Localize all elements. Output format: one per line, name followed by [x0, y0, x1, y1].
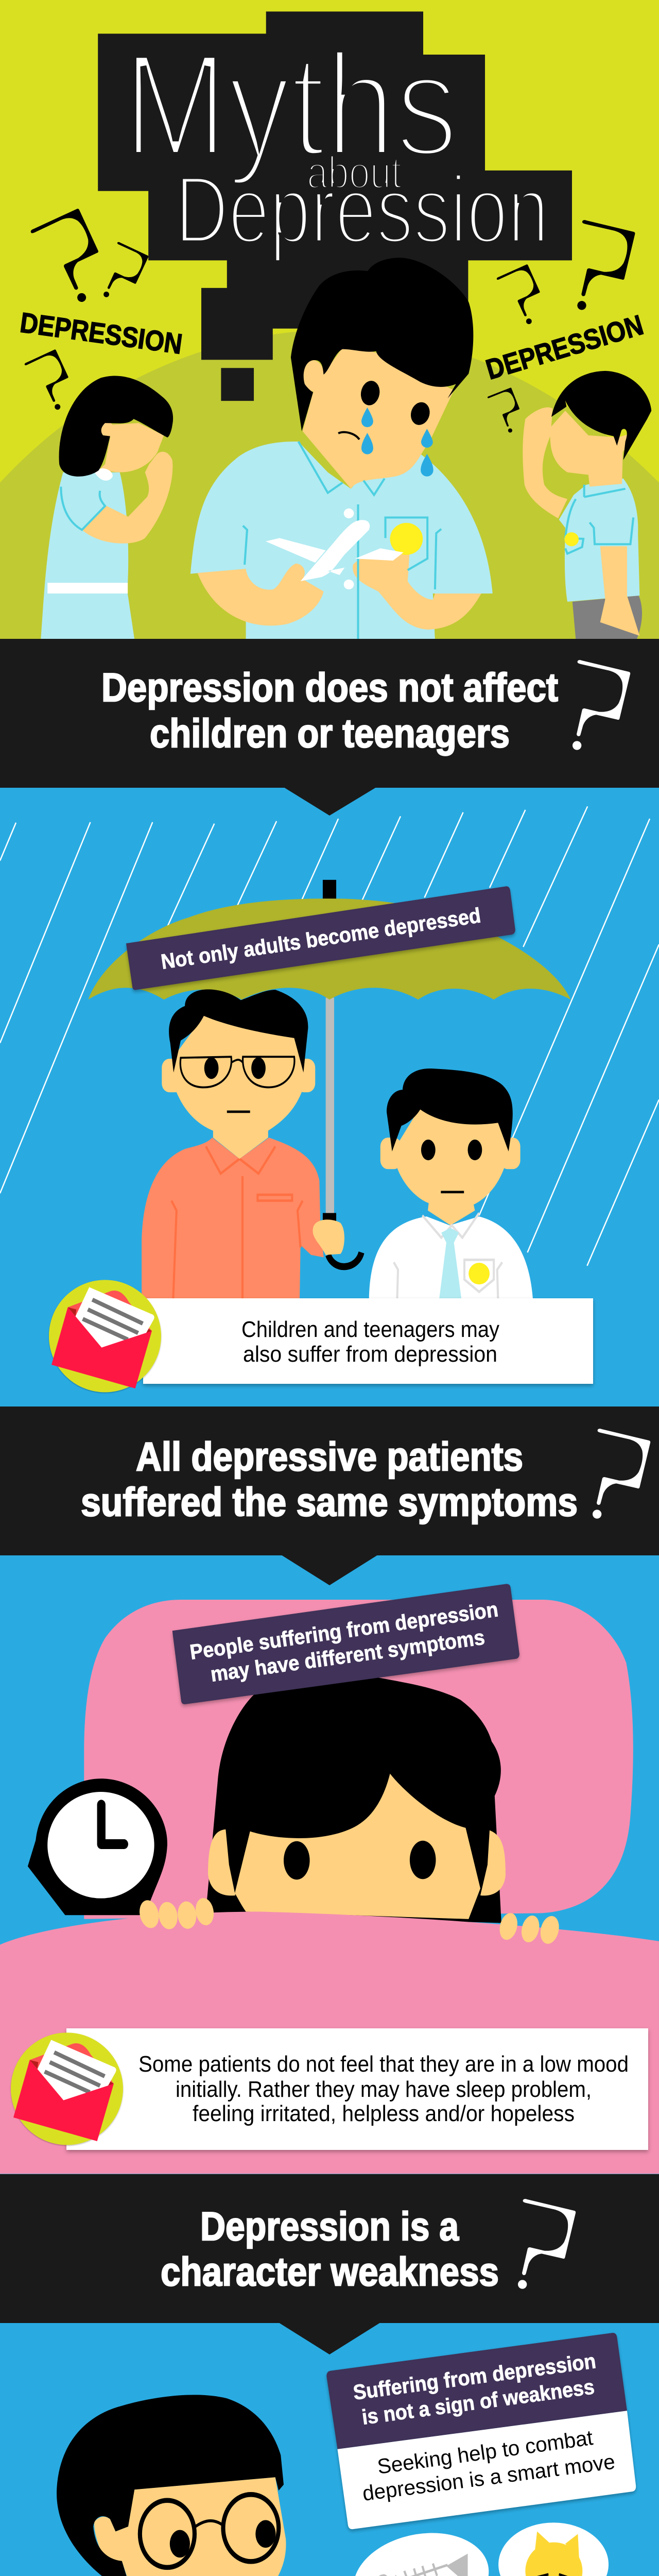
title	[123, 22, 549, 263]
hill background	[0, 330, 659, 639]
rain	[0, 806, 659, 1266]
note box: feeling irritated, helpless and/or hopeless	[193, 2101, 575, 2126]
panel: myth 2	[0, 1406, 659, 2174]
note box	[143, 1298, 593, 1384]
question mark: right lower	[485, 383, 532, 433]
question mark: right small	[494, 258, 557, 325]
question mark: left small	[103, 241, 150, 304]
right boy	[523, 371, 651, 639]
ribbon text line 2: may have different symptoms	[209, 1625, 486, 1686]
note box: also suffer from depression	[243, 1342, 497, 1367]
title: about	[307, 147, 402, 198]
heading band: Depression is a	[200, 2204, 459, 2249]
boy	[369, 1069, 533, 1299]
left girl	[41, 376, 173, 639]
headboard	[84, 1600, 633, 1919]
card body line 2: depression is a smart move	[361, 2450, 616, 2505]
ribbon text: Not only adults become depressed	[160, 903, 482, 974]
speech bubble: sad cat	[498, 2522, 609, 2576]
thought cloud	[98, 11, 572, 401]
purple ribbon	[126, 886, 515, 990]
title: Myths	[123, 22, 458, 188]
speech bubble: fish	[349, 2523, 494, 2576]
heading band: children or teenagers	[150, 710, 510, 756]
title: Depression	[175, 157, 549, 263]
fingers	[136, 1895, 562, 1947]
panel: myth 3	[0, 2174, 659, 2576]
heading band	[0, 1406, 659, 1585]
icon: clock	[28, 1778, 167, 1915]
father	[142, 989, 344, 1299]
note box: Children and teenagers may	[241, 1317, 499, 1342]
card heading line 1: Suffering from depression	[352, 2349, 597, 2404]
note box	[66, 2028, 648, 2150]
heading band: Depression does not affect	[101, 665, 558, 710]
heading band: character weakness	[161, 2249, 499, 2294]
umbrella	[88, 880, 571, 1267]
center boy	[190, 258, 493, 639]
boy writing	[34, 2395, 404, 2576]
heading band	[0, 2174, 659, 2354]
heading band: All depressive patients	[136, 1434, 523, 1479]
heading band	[0, 639, 659, 816]
question mark: left large	[26, 199, 126, 303]
panel: hero	[0, 0, 659, 639]
icon: envelope	[49, 1280, 161, 1392]
label: depression left: DEPRESSION	[18, 306, 184, 360]
ribbon text line 1: People suffering from depression	[188, 1597, 499, 1664]
patient in bed	[206, 1677, 506, 1923]
icon: envelope	[11, 2032, 123, 2145]
question mark: right large	[577, 220, 635, 310]
card body line 1: Seeking help to combat	[376, 2426, 595, 2479]
question mark: left lower	[22, 343, 86, 411]
ribbon card	[326, 2333, 636, 2529]
note box: Some patients do not feel that they are in a low mood	[138, 2052, 629, 2077]
panel: myth 1	[0, 639, 659, 1406]
note box: initially. Rather they may have sleep problem,	[176, 2077, 592, 2102]
heading band: suffered the same symptoms	[81, 1479, 578, 1524]
purple ribbon	[172, 1584, 519, 1704]
blanket	[0, 1912, 659, 2174]
card heading line 2: is not a sign of weakness	[360, 2375, 596, 2429]
